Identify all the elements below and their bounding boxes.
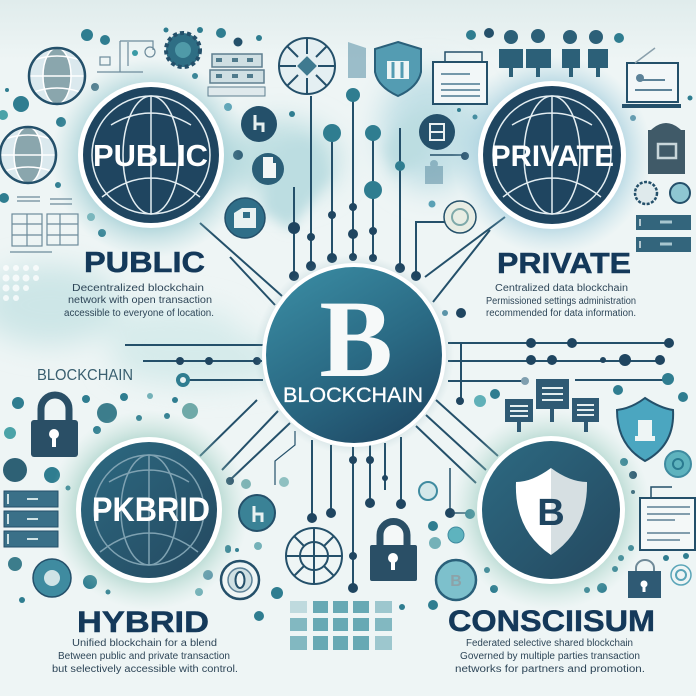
icon: server panel [208, 54, 265, 96]
private badge [478, 81, 626, 229]
public description: network with open transaction [68, 295, 212, 306]
icon: large lock centre [370, 522, 417, 581]
connector nodes [176, 88, 674, 593]
hybrid description: Unified blockchain for a blend [72, 638, 217, 649]
consortium description: Federated selective shared blockchain [466, 638, 633, 649]
icon: data tables [10, 197, 78, 252]
icon: ring node [419, 482, 437, 500]
hub B letter: B [319, 278, 393, 400]
panel: public [51, 58, 251, 319]
icon: document folder [433, 52, 487, 104]
icon: round teal ring [665, 451, 691, 477]
public badge: PUBLIC [93, 138, 208, 173]
public glow [51, 58, 251, 258]
icon: server bars left [4, 491, 58, 547]
blockchain small label: BLOCKCHAIN [37, 367, 133, 384]
private description: recommended for data information. [486, 308, 636, 319]
public description: accessible to everyone of location. [64, 308, 214, 319]
icon: chart document [97, 41, 155, 72]
hybrid description: but selectively accessible with control. [52, 664, 238, 675]
consortium glow [451, 410, 651, 610]
icon: round node badges [635, 182, 690, 204]
private heading: PRIVATE [497, 248, 631, 280]
icon: round h badge [241, 106, 277, 142]
icon: teal disc [448, 527, 464, 543]
icon: small lock [628, 560, 661, 598]
icon: network wheel bottom [286, 528, 342, 584]
icon: monitors [505, 379, 599, 432]
panel: private [452, 55, 652, 319]
hybrid badge [76, 437, 222, 583]
icon: large lock left [31, 395, 78, 457]
icon: round teal brain badge [33, 559, 71, 597]
icon: shield B top [375, 42, 421, 96]
icon: round B badge [419, 114, 455, 150]
private description: Centralized data blockchain [495, 283, 628, 294]
icon: lock right [648, 123, 685, 174]
consortium badge [477, 436, 625, 584]
public description [64, 283, 214, 319]
hybrid description: Between public and private transaction [58, 651, 230, 662]
consortium heading: CONSCIISUM [448, 605, 655, 638]
hybrid description [52, 638, 238, 675]
icon: round h badge teal [239, 495, 275, 531]
private description [486, 283, 636, 319]
consortium description: Governed by multiple parties transaction [460, 651, 640, 662]
icon: faded lock [425, 160, 443, 184]
private badge: PRIVATE [491, 140, 614, 173]
icon: spiral ring [671, 565, 691, 585]
icon: globe left [0, 127, 56, 183]
icon: keypad grid [290, 601, 392, 650]
icon: globe top left [29, 48, 85, 104]
icon: gear [166, 33, 200, 67]
icon: network users [499, 29, 608, 77]
icon: round O badge [221, 561, 259, 599]
panel: consortium [448, 410, 655, 675]
icon: laptop document [622, 48, 681, 106]
central blockchain hub [254, 255, 454, 455]
connector lines [125, 95, 668, 588]
icon: faded map tile [348, 42, 366, 78]
public badge [78, 82, 224, 228]
hub label: BLOCKCHAIN [283, 384, 423, 407]
halftone dot texture [2, 265, 39, 301]
consortium description: networks for partners and promotion. [455, 664, 645, 675]
icon: server bars right [636, 215, 691, 252]
private glow [452, 55, 652, 255]
icon: document right [640, 487, 695, 550]
hybrid glow [49, 410, 249, 610]
icon: coin badge [444, 201, 476, 233]
icon: shield teal [617, 398, 673, 461]
icon: network wheel top [279, 38, 335, 94]
private description: Permissioned settings administration [486, 296, 636, 307]
icon: round B coin teal: B [450, 573, 462, 590]
icon: shield with B: B [537, 492, 565, 534]
icon: shield with B [516, 468, 587, 555]
public description: Decentralized blockchain [72, 283, 204, 294]
hybrid heading: HYBRID [77, 606, 209, 639]
panel: hybrid [49, 410, 249, 675]
public heading: PUBLIC [84, 247, 205, 279]
consortium description [455, 638, 645, 675]
icon: round document badge [252, 153, 284, 185]
icon: round save badge [225, 198, 265, 238]
hybrid badge: PKBRID [92, 491, 210, 529]
icon: round B coin teal [436, 560, 476, 600]
